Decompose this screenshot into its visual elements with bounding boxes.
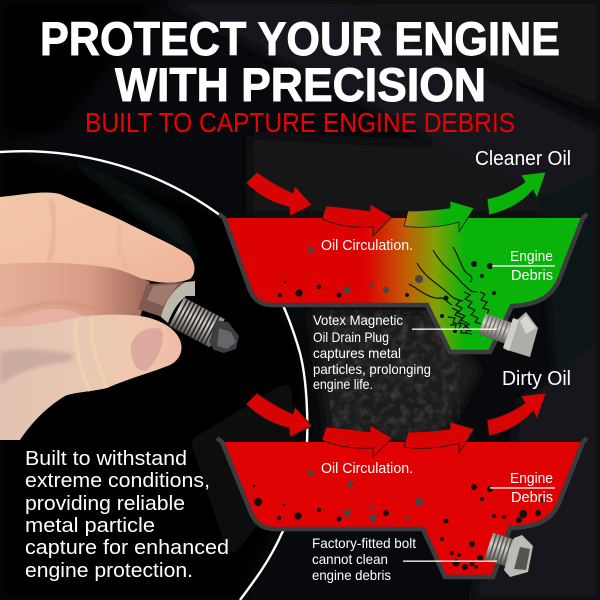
callout: engine debris top [492, 248, 555, 284]
callout: engine debris top: Engine [510, 248, 553, 265]
callout: engine debris bottom [490, 470, 555, 506]
red flow arrows, bottom pan [246, 393, 546, 457]
text block: description: capture for enhanced [25, 537, 229, 559]
callout: factory-fitted bolt: engine debris [312, 567, 391, 583]
title: WITH PRECISION [115, 58, 486, 111]
white circle outline [0, 151, 307, 600]
arrow 3 [404, 422, 474, 453]
icon: factory bolt [484, 533, 533, 577]
callout: factory-fitted bolt: cannot clean [312, 551, 388, 567]
arrow 2 [322, 204, 392, 236]
label: Dirty Oil: Dirty Oil [502, 367, 571, 390]
callout: Votex magnetic plug: particles, prolonging [313, 361, 431, 377]
callout: Votex magnetic plug: captures metal [313, 345, 401, 361]
squiggly magnetic attraction lines [409, 247, 492, 334]
arrow 4 [487, 172, 546, 215]
panel: dirty oil pan [217, 438, 587, 577]
debris particles [253, 470, 546, 570]
hand holding magnetic plug [0, 192, 239, 440]
callout: Votex magnetic plug: Votex Magnetic [313, 312, 403, 328]
text block: description: metal particle [25, 515, 155, 537]
debris particles [278, 247, 496, 333]
icon: magnetic drain plug in hand [138, 281, 239, 353]
red and green flow arrows, top pan [246, 172, 546, 236]
text block: description: providing reliable [25, 493, 185, 515]
callout: factory-fitted bolt [312, 535, 497, 583]
callout: factory-fitted bolt: Factory-fitted bolt [312, 535, 416, 551]
label: oil circulation top: Oil Circulation. [321, 237, 413, 254]
callout: Votex magnetic plug: engine life. [313, 376, 373, 392]
text block: description: Built to withstand [25, 448, 187, 470]
text block: description: extreme conditions, [25, 470, 210, 492]
subtitle: BUILT TO CAPTURE ENGINE DEBRIS [85, 107, 515, 138]
arrow 1 [246, 172, 312, 216]
arrow 1 [246, 393, 312, 437]
panel: cleaner oil pan [219, 214, 587, 357]
palm and middle finger [0, 258, 150, 332]
title [40, 12, 560, 111]
oil pan fill [224, 218, 583, 352]
label: oil circulation bottom: Oil Circulation. [321, 460, 413, 477]
index finger [0, 192, 194, 283]
pan wall [217, 438, 587, 577]
text block: description [25, 448, 229, 582]
title: PROTECT YOUR ENGINE [40, 12, 560, 65]
callout: engine debris bottom: Debris [511, 489, 553, 506]
arrow 2 [322, 425, 392, 457]
text block: description: engine protection. [25, 560, 193, 582]
label: Cleaner Oil: Cleaner Oil [475, 147, 571, 170]
icon: magnetic plug [478, 312, 538, 357]
oil pan fill [222, 442, 583, 577]
arrow 4 [487, 393, 546, 436]
thumb [0, 315, 182, 440]
arrow 3 [404, 201, 474, 232]
callout: engine debris top: Debris [511, 267, 553, 284]
callout: Votex magnetic plug [313, 312, 497, 392]
callout: Votex magnetic plug: Oil Drain Plug [313, 329, 389, 345]
pan wall [219, 214, 587, 352]
callout: engine debris bottom: Engine [510, 470, 553, 487]
